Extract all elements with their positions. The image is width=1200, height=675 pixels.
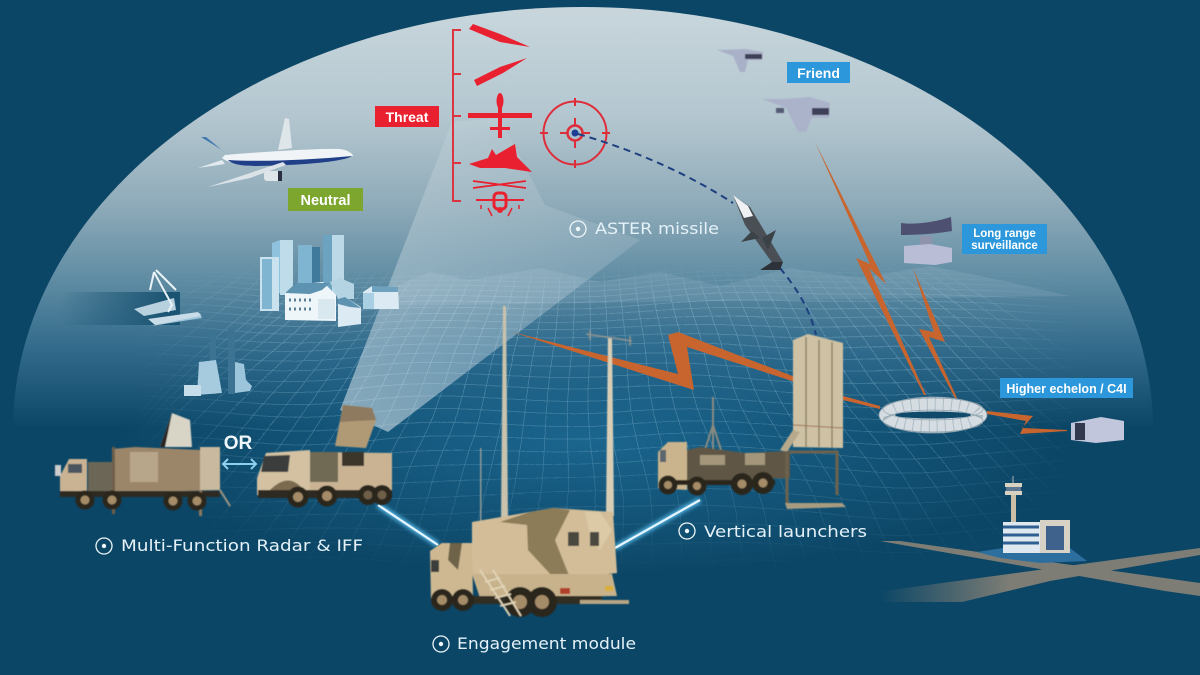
connector beams	[378, 500, 700, 548]
launcher chassis	[780, 430, 800, 452]
terrain wireframe mesh	[154, 272, 1065, 556]
badge: Threat: Threat	[386, 109, 429, 125]
faint mountain horizon	[380, 266, 1070, 306]
ship and crane	[60, 270, 202, 326]
friend jet large	[762, 97, 830, 132]
shelter	[472, 508, 617, 578]
data link to C4I	[987, 411, 1067, 434]
C4I container	[1071, 417, 1124, 443]
threat group	[375, 24, 532, 216]
launcher canister	[793, 334, 843, 448]
badge: Friend	[787, 62, 850, 83]
badge: Higher echelon / C4I: Higher echelon / C4I	[1006, 382, 1127, 396]
radar truck: multi-function radar option A	[55, 413, 230, 516]
airport terminal and tower	[977, 476, 1087, 563]
badge: Long range surveillance: surveillance	[971, 240, 1038, 252]
ASTER missile	[733, 195, 786, 270]
radar dome	[13, 7, 1153, 430]
masts	[480, 306, 632, 523]
main orange data link	[512, 332, 880, 409]
text: OR: OR	[224, 433, 253, 454]
cruise missile icon	[469, 24, 530, 47]
center ground glow	[120, 305, 1060, 575]
badge: Long range surveillance: Long range	[973, 228, 1036, 240]
long range surveillance radar	[901, 217, 952, 265]
badge: Neutral	[288, 188, 363, 211]
runways	[880, 541, 1200, 602]
factory chimneys	[184, 330, 252, 396]
communication ring hub	[879, 397, 987, 433]
airliner	[198, 118, 353, 187]
badge: Neutral: Neutral	[301, 193, 350, 209]
label: Engagement module: Engagement module	[457, 634, 636, 653]
data link from surveillance radar	[913, 268, 957, 398]
badge: Long range surveillance	[962, 224, 1047, 254]
double arrow	[223, 459, 256, 469]
target reticle	[540, 98, 610, 168]
threat bracket	[453, 30, 461, 201]
badge: Higher echelon / C4I	[1000, 378, 1133, 398]
drone icon	[468, 93, 532, 138]
badge: Friend: Friend	[797, 65, 840, 81]
fighter icon	[469, 144, 532, 172]
city buildings	[260, 235, 399, 327]
missile flight path	[578, 134, 816, 335]
radar beam	[340, 118, 640, 432]
anti-ship missile icon	[474, 58, 527, 86]
data link from friend aircraft	[815, 142, 926, 395]
vertical launcher truck	[658, 334, 846, 509]
label: Multi-Function Radar & IFF: Multi-Function Radar & IFF	[121, 536, 363, 555]
radar truck: multi-function radar option B	[257, 405, 392, 508]
label: Vertical launchers: Vertical launchers	[704, 522, 867, 541]
launcher mast	[705, 397, 721, 450]
engagement module truck	[430, 306, 632, 617]
label: ASTER missile: ASTER missile	[595, 219, 719, 238]
cab and chassis	[430, 543, 473, 600]
helicopter icon	[473, 181, 526, 216]
friend jet small	[717, 49, 763, 72]
badge: Threat	[375, 106, 439, 127]
